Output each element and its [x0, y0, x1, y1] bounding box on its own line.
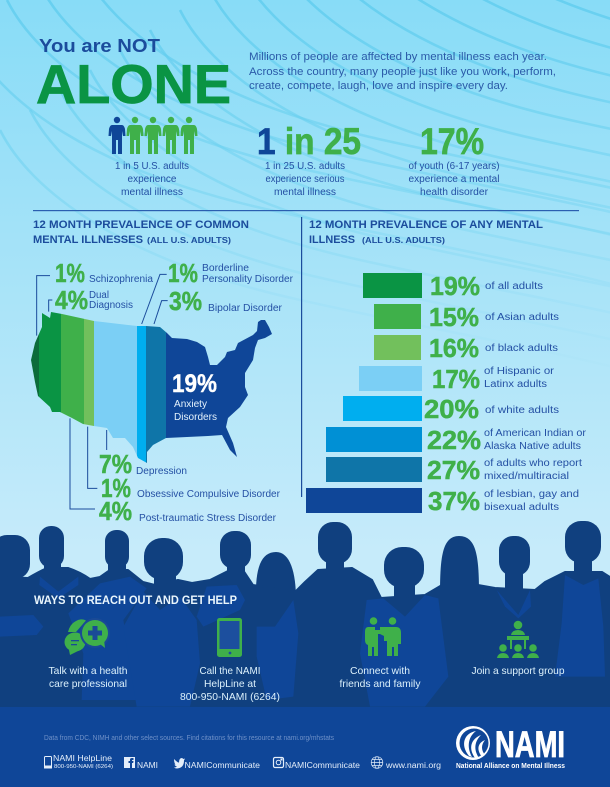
row: all adults: 19%	[430, 273, 480, 301]
row: American Indian or Alaska Native adults: Alaska Native adults	[484, 441, 581, 452]
row: Hispanic or Latinx adults: of Hispanic or	[484, 366, 555, 377]
label: bipolar disorder: 3%	[169, 288, 202, 316]
title: You are NOT	[39, 36, 160, 56]
row: white adults: of white adults	[485, 405, 559, 416]
caption: health care professional	[48, 665, 128, 690]
label: depression: Depression	[136, 466, 187, 477]
caption: experience serious	[266, 174, 344, 185]
label: dual diagnosis: 4%	[55, 287, 88, 315]
label: borderline personality disorder: 1%	[168, 260, 198, 288]
caption: 1 in 5 U.S. adults	[115, 161, 189, 172]
logo swirl	[456, 726, 490, 760]
caption: experience a mental	[408, 174, 500, 185]
caption: NAMI HelpLine	[180, 665, 280, 703]
caption	[115, 161, 189, 198]
instagram: NAMICommunicate	[285, 761, 361, 770]
caption: 1 in 25 U.S. adults	[265, 161, 345, 172]
caption: NAMI HelpLine: HelpLine at	[204, 678, 256, 690]
footer	[0, 707, 610, 787]
website	[371, 757, 441, 770]
heading	[309, 219, 543, 246]
stat: 17% of youth	[408, 121, 500, 198]
intro text	[249, 51, 556, 92]
row: mixed/multiracial adults	[427, 457, 582, 485]
row: American Indian or Alaska Native adults: of American Indian or	[484, 428, 587, 439]
facebook: NAMI	[137, 761, 158, 770]
caption: friends and family: Connect with	[350, 665, 410, 677]
caption: of youth (6-17 years)	[408, 161, 500, 172]
title: ALONE	[36, 53, 231, 115]
row: lesbian, gay and bisexual adults	[428, 488, 579, 516]
heading: MENTAL ILLNESSES	[33, 234, 143, 246]
label: borderline personality disorder	[168, 260, 294, 288]
label: borderline personality disorder: Borderline	[202, 263, 249, 274]
label: dual diagnosis: Diagnosis	[89, 300, 133, 311]
caption: NAMI HelpLine: 800-950-NAMI (6264)	[180, 691, 280, 703]
label: schizophrenia: Schizophrenia	[89, 274, 153, 285]
caption: support group: Join a support group	[472, 665, 565, 677]
silhouette crowd	[0, 521, 610, 707]
icon: support group	[497, 621, 539, 658]
row: Asian adults	[429, 304, 559, 332]
label: anxiety disorders: Anxiety	[174, 398, 208, 410]
label: dual diagnosis: Dual	[89, 290, 109, 301]
intro text: Across the country, many people just like you work, perform,	[249, 66, 556, 78]
label: depression	[99, 451, 187, 479]
caption: mental illness	[274, 187, 336, 198]
row: mixed/multiracial adults: mixed/multiracial	[484, 471, 569, 482]
helpline contact: 800-950-NAMI (6264)	[54, 764, 113, 770]
NAMI logo: NAMI	[495, 724, 565, 765]
caption	[408, 161, 500, 198]
stat: 1 in 5 adults	[108, 117, 198, 198]
twitter: NAMICommunicate	[184, 761, 261, 770]
stat: 1 in 25	[257, 121, 361, 198]
heading: 12 MONTH PREVALENCE OF ANY MENTAL	[309, 219, 543, 231]
label: dual diagnosis	[55, 287, 133, 315]
clothing highlights, right group	[360, 575, 605, 707]
panel: ways to get help	[34, 593, 565, 703]
stat: 17% of youth: 17%	[420, 121, 484, 162]
leader lines	[37, 274, 168, 509]
label: bipolar disorder: Bipolar Disorder	[208, 303, 283, 314]
row: American Indian or Alaska Native adults	[427, 427, 587, 455]
row: black adults	[429, 335, 558, 363]
helpline contact: NAMI HelpLine	[53, 754, 113, 763]
row: mixed/multiracial adults: of adults who report	[484, 458, 582, 469]
label: anxiety disorders	[172, 370, 217, 423]
panel: common mental illnesses	[20, 219, 294, 526]
row: mixed/multiracial adults: 27%	[427, 457, 480, 485]
row: all adults	[430, 273, 543, 301]
row: Hispanic or Latinx adults: Latinx adults	[484, 379, 547, 390]
row: white adults: 20%	[424, 396, 479, 424]
NAMI logo: National Alliance on Mental Illness	[456, 763, 565, 770]
label: post-traumatic stress disorder: 4%	[99, 498, 132, 526]
heading: 12 MONTH PREVALENCE OF COMMON	[33, 219, 249, 231]
panel: any mental illness	[306, 219, 587, 516]
label: obsessive compulsive disorder	[101, 475, 281, 503]
map of the United States with prevalence bands	[31, 312, 272, 463]
instagram	[274, 758, 361, 770]
heading: WAYS TO REACH OUT AND GET HELP	[34, 593, 237, 607]
label: obsessive compulsive disorder: 1%	[101, 475, 131, 503]
caption: NAMI HelpLine: Call the NAMI	[200, 665, 260, 677]
label: anxiety disorders: 19%	[172, 370, 217, 398]
heading	[33, 219, 249, 246]
row: black adults: of black adults	[485, 343, 558, 354]
caption: health care professional: care professional	[49, 678, 127, 690]
caption	[265, 161, 345, 198]
NAMI logo	[456, 724, 565, 770]
icon: two friends	[365, 617, 401, 656]
heading: (ALL U.S. ADULTS)	[362, 235, 445, 245]
icon: chat bubbles with plus	[64, 618, 110, 655]
label: post-traumatic stress disorder	[99, 498, 277, 526]
label: depression: 7%	[99, 451, 132, 479]
caption: health care professional: Talk with a health	[48, 665, 128, 677]
row: Hispanic or Latinx adults: 17%	[432, 366, 480, 394]
row: Asian adults: 15%	[429, 304, 479, 332]
label: bipolar disorder	[169, 288, 283, 316]
caption: experience	[128, 174, 177, 185]
row: black adults: 16%	[429, 335, 479, 363]
label: borderline personality disorder: Personality Disorder	[202, 274, 294, 285]
sources: Data from CDC, NIMH and other select sources. Find citations for this resource at nami.org/mhstats	[44, 733, 334, 742]
bar chart	[306, 273, 422, 513]
row: Asian adults: of Asian adults	[485, 312, 559, 323]
row: lesbian, gay and bisexual adults: of lesbian, gay and	[484, 489, 579, 500]
caption: friends and family: friends and family	[340, 678, 421, 690]
icon: five people, one highlighted	[108, 117, 198, 154]
heading: (ALL U.S. ADULTS)	[147, 235, 231, 245]
label: anxiety disorders: Disorders	[174, 411, 217, 423]
row: lesbian, gay and bisexual adults: bisexual adults	[484, 502, 559, 513]
caption: health disorder	[420, 187, 489, 198]
caption: friends and family	[340, 665, 421, 690]
twitter	[174, 758, 261, 770]
caption: mental illness	[121, 187, 183, 198]
row: lesbian, gay and bisexual adults: 37%	[428, 488, 480, 516]
label: post-traumatic stress disorder: Post-traumatic Stress Disorder	[139, 513, 277, 524]
intro text: Millions of people are affected by mental illness each year.	[249, 51, 547, 63]
helpline contact	[44, 754, 113, 770]
label: schizophrenia	[55, 260, 153, 288]
website: www.nami.org	[385, 761, 441, 770]
row: all adults: of all adults	[485, 281, 543, 292]
intro text: create, compete, laugh, love and inspire every day.	[249, 80, 508, 92]
stat: 1 in 25: 1 in 25	[257, 121, 361, 162]
icon: mobile phone	[217, 618, 242, 657]
row: Hispanic or Latinx adults	[432, 366, 555, 394]
row: white adults	[424, 396, 559, 424]
clothing highlights	[0, 577, 298, 707]
row: American Indian or Alaska Native adults: 22%	[427, 427, 481, 455]
facebook	[124, 757, 158, 770]
label: obsessive compulsive disorder: Obsessive Compulsive Disorder	[137, 489, 281, 500]
label: schizophrenia: 1%	[55, 260, 85, 288]
heading: ILLNESS	[309, 234, 355, 246]
